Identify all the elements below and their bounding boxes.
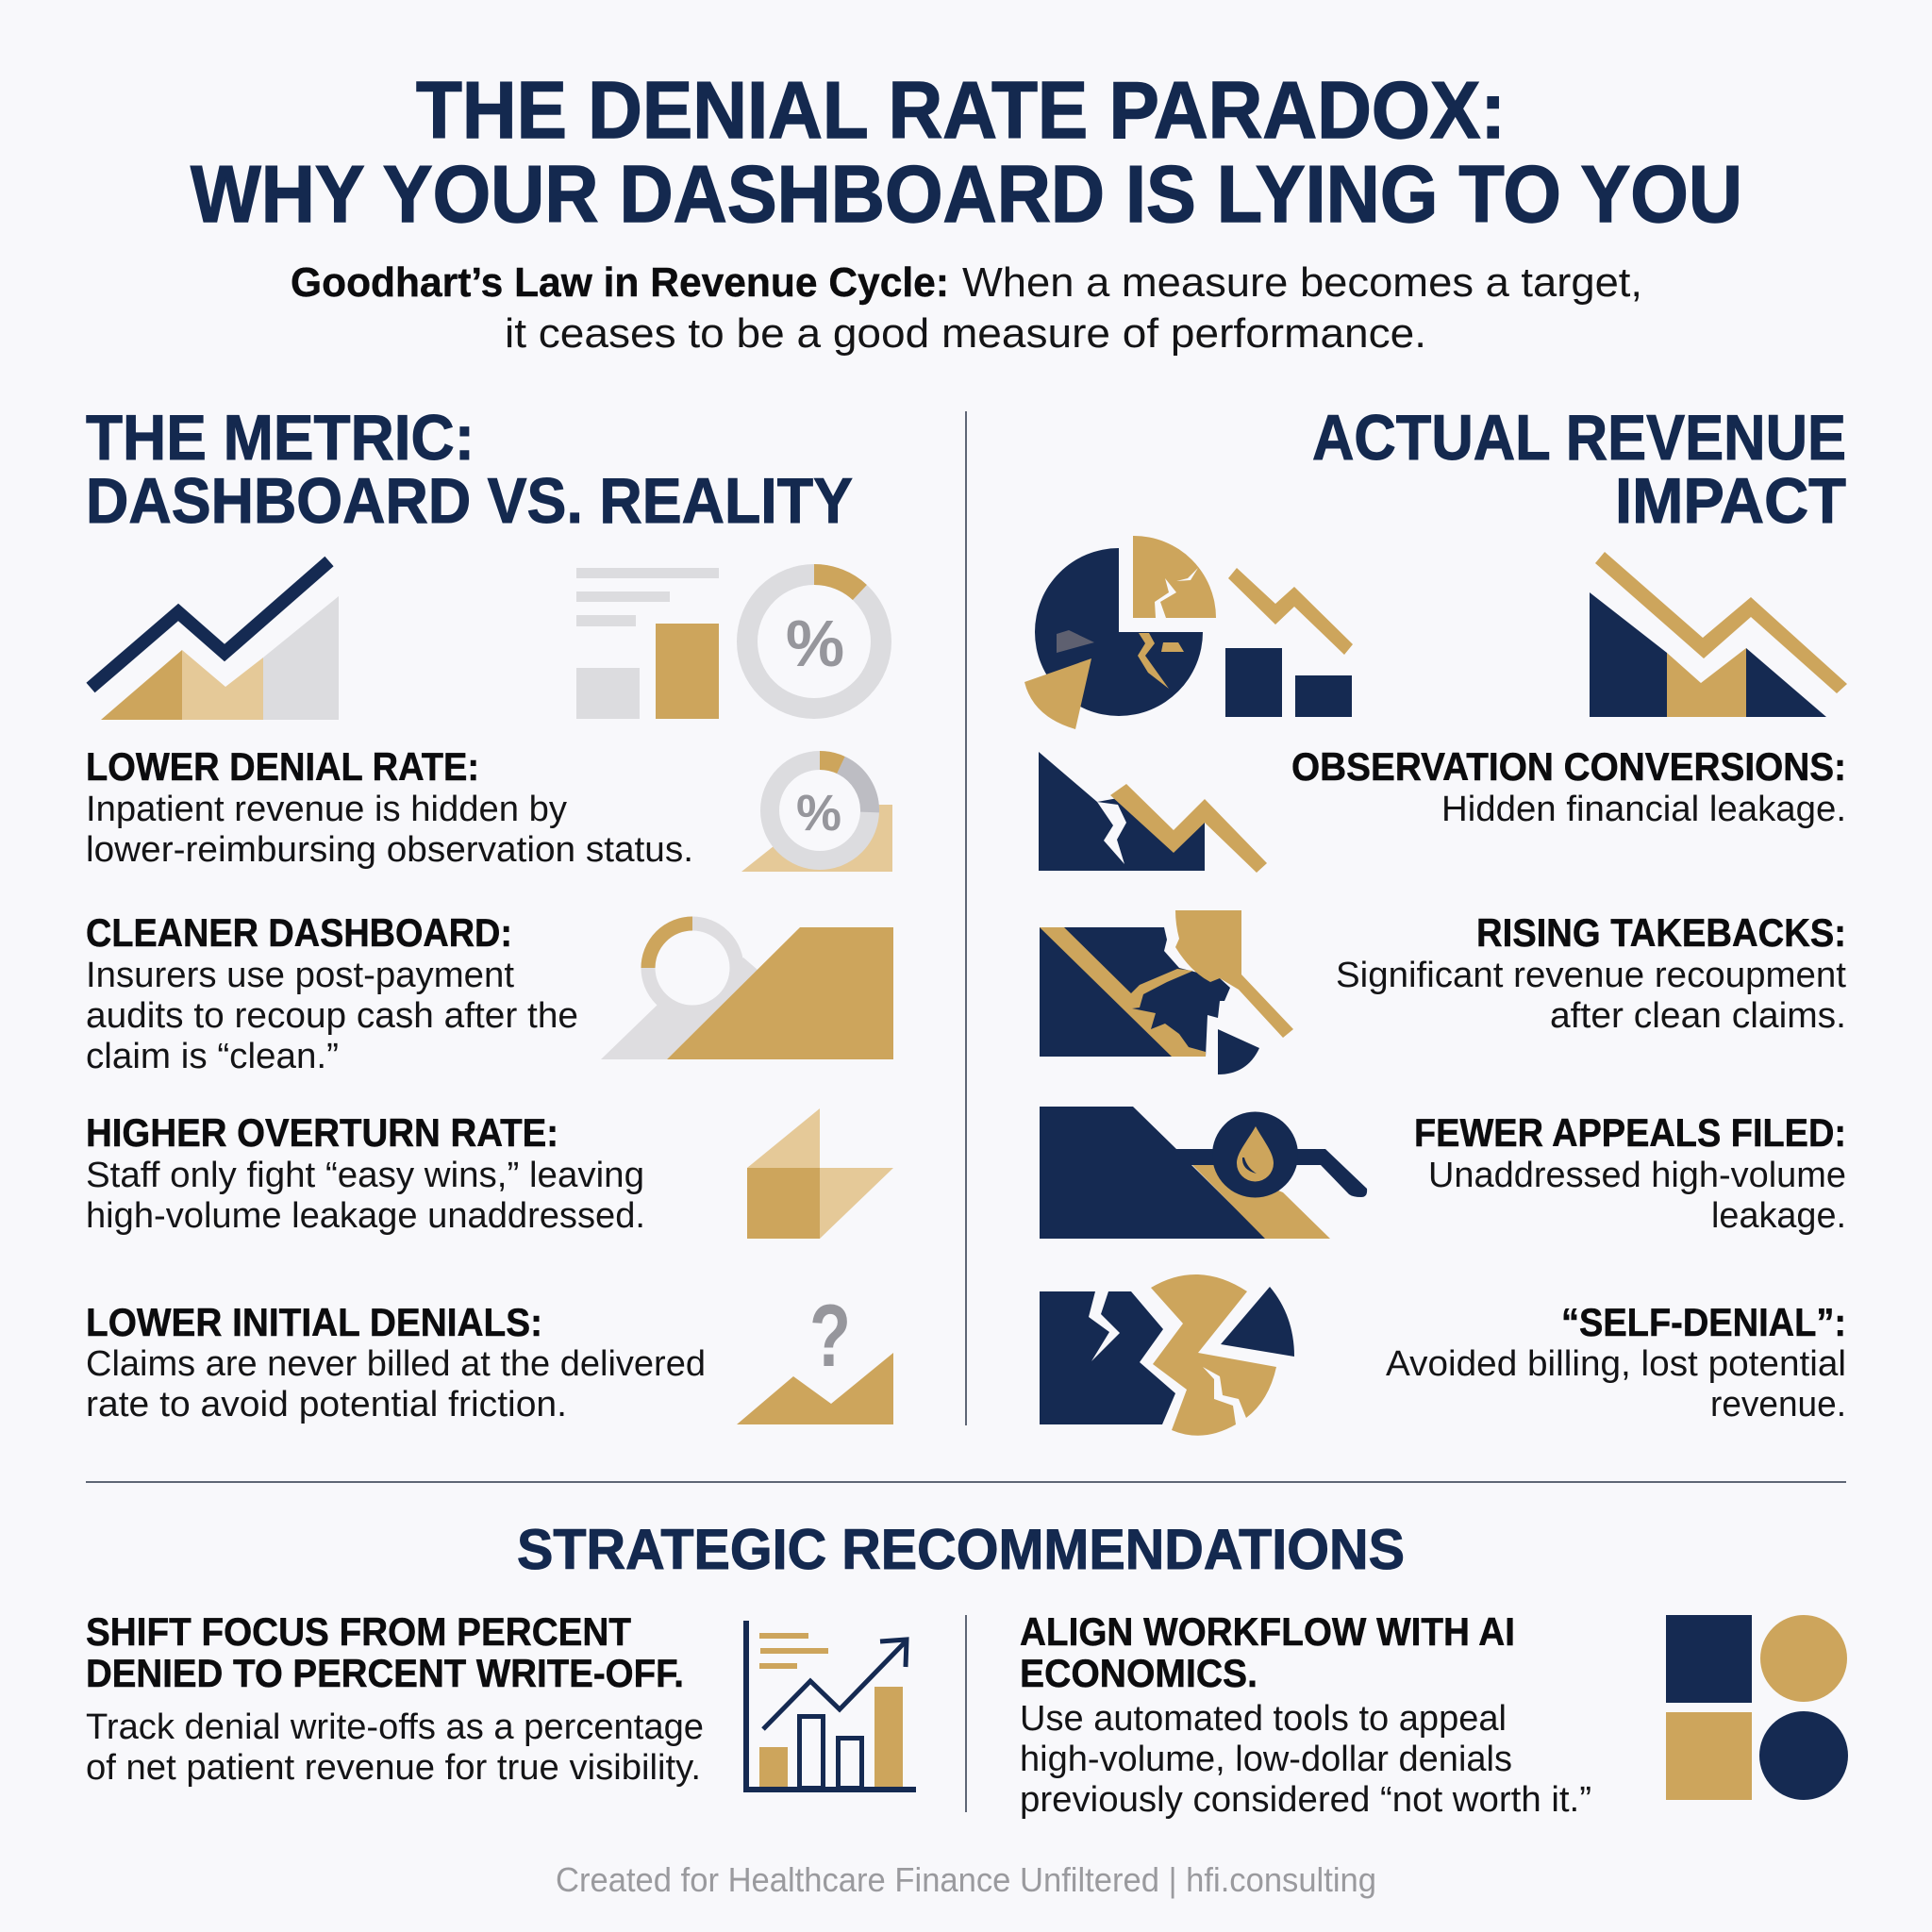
heading: actual revenue impact: IMPACT bbox=[1615, 465, 1846, 537]
body: higher overturn rate: Staff only fight “easy wins,” leaving bbox=[86, 1156, 644, 1195]
heading: the metric: THE METRIC: bbox=[86, 402, 475, 474]
body: self-denial: revenue. bbox=[1710, 1385, 1846, 1424]
icon: rising line chart bbox=[91, 561, 339, 720]
heading: actual revenue impact: ACTUAL REVENUE bbox=[1312, 402, 1846, 474]
body: lower initial denials: Claims are never billed at the delivered bbox=[86, 1344, 706, 1384]
body: align workflow: Use automated tools to appeal bbox=[1020, 1699, 1507, 1739]
heading: align workflow bbox=[1020, 1609, 1515, 1695]
icon: folded gold shape bbox=[747, 1108, 893, 1239]
icon: squares and circles bbox=[1666, 1615, 1848, 1800]
heading: fewer appeals filed: FEWER APPEALS FILED: bbox=[1414, 1110, 1846, 1155]
body: align workflow bbox=[1020, 1699, 1591, 1820]
heading: shift focus: DENIED TO PERCENT WRITE-OFF. bbox=[86, 1651, 684, 1695]
heading: higher overturn rate: HIGHER OVERTURN RATE: bbox=[86, 1110, 558, 1155]
body: fewer appeals filed: Unaddressed high-volume bbox=[1428, 1156, 1846, 1195]
panel: lower initial denials bbox=[86, 1286, 893, 1424]
icon: cracked falling chart bbox=[1039, 752, 1267, 873]
body: higher overturn rate bbox=[86, 1156, 645, 1236]
body: higher overturn rate: high-volume leakage unaddressed. bbox=[86, 1196, 645, 1236]
icon: dashboard bars bbox=[576, 568, 719, 719]
body: self-denial: Avoided billing, lost potential bbox=[1386, 1344, 1846, 1384]
heading: lower denial rate: LOWER DENIAL RATE: bbox=[86, 744, 479, 789]
panel: shift focus recommendation bbox=[86, 1609, 916, 1790]
icon: small percent donut: % bbox=[796, 785, 841, 841]
icon: shattered chart and pie bbox=[1040, 1274, 1294, 1436]
icon: question mark over chart bbox=[737, 1286, 893, 1424]
title bbox=[191, 66, 1742, 240]
icon: fractured takeback chart bbox=[1040, 910, 1293, 1074]
panel: fewer appeals filed bbox=[1040, 1107, 1846, 1239]
title: THE DENIAL RATE PARADOX: bbox=[416, 66, 1506, 156]
panel: rising takebacks bbox=[1040, 910, 1846, 1074]
heading: strategic recommendations: STRATEGIC RECOMMENDATIONS bbox=[517, 1518, 1405, 1581]
subtitle: Goodhart's Law: Goodhart’s Law in Revenue Cycle: bbox=[291, 259, 949, 306]
body: lower denial rate bbox=[86, 790, 693, 870]
body: rising takebacks: after clean claims. bbox=[1550, 996, 1846, 1036]
body: cleaner dashboard: claim is “clean.” bbox=[86, 1037, 339, 1076]
body: rising takebacks: Significant revenue recoupment bbox=[1336, 956, 1846, 995]
body: shift focus bbox=[86, 1707, 704, 1788]
heading: align workflow: ALIGN WORKFLOW WITH AI bbox=[1020, 1609, 1515, 1654]
body: lower denial rate: Inpatient revenue is hidden by bbox=[86, 790, 567, 829]
heading: observation conversions: OBSERVATION CONVERSIONS: bbox=[1291, 744, 1846, 789]
heading: lower initial denials: LOWER INITIAL DENIALS: bbox=[86, 1300, 542, 1344]
body: align workflow: previously considered “not worth it.” bbox=[1020, 1780, 1591, 1820]
footer credit: Created for Healthcare Finance Unfiltered | hfi.consulting bbox=[556, 1860, 1376, 1899]
panel: self-denial bbox=[1040, 1274, 1846, 1436]
body: observation conversions: Hidden financial leakage. bbox=[1441, 790, 1846, 829]
icon: bar chart with rising arrow bbox=[746, 1621, 916, 1790]
subtitle: Goodhart's Law bbox=[291, 259, 1642, 357]
icon: percent donut bbox=[747, 575, 881, 708]
icon: magnifier and ramp bbox=[601, 924, 893, 1059]
heading: self-denial: “SELF-DENIAL”: bbox=[1561, 1300, 1846, 1344]
body: rising takebacks bbox=[1336, 956, 1846, 1036]
heading: align workflow: ECONOMICS. bbox=[1020, 1651, 1257, 1695]
panel: lower denial rate bbox=[86, 744, 892, 872]
subtitle: Goodhart's Law: it ceases to be a good measure of performance. bbox=[505, 310, 1426, 357]
icon: question mark over chart: ? bbox=[809, 1286, 851, 1385]
title: WHY YOUR DASHBOARD IS LYING TO YOU bbox=[191, 150, 1742, 240]
heading: the metric bbox=[86, 402, 853, 537]
icon: percent donut: % bbox=[786, 607, 844, 680]
heading: rising takebacks: RISING TAKEBACKS: bbox=[1476, 910, 1846, 955]
body: lower initial denials: rate to avoid potential friction. bbox=[86, 1385, 567, 1424]
subtitle: Goodhart's Law: When a measure becomes a target, bbox=[962, 259, 1642, 306]
panel: cleaner dashboard bbox=[86, 910, 893, 1076]
body: cleaner dashboard: Insurers use post-payment bbox=[86, 956, 514, 995]
heading: shift focus: SHIFT FOCUS FROM PERCENT bbox=[86, 1609, 631, 1654]
body: fewer appeals filed: leakage. bbox=[1711, 1196, 1846, 1236]
icon: falling zigzag with bars bbox=[1225, 568, 1353, 717]
icon: falling area chart bbox=[1590, 552, 1847, 717]
body: self-denial bbox=[1386, 1344, 1846, 1424]
body: align workflow: high-volume, low-dollar denials bbox=[1020, 1740, 1512, 1779]
body: lower initial denials bbox=[86, 1344, 706, 1424]
heading: actual revenue impact bbox=[1312, 402, 1846, 537]
panel: higher overturn rate bbox=[86, 1108, 893, 1239]
body: fewer appeals filed bbox=[1428, 1156, 1846, 1236]
heading: cleaner dashboard: CLEANER DASHBOARD: bbox=[86, 910, 512, 955]
heading: shift focus bbox=[86, 1609, 684, 1695]
heading: the metric: DASHBOARD VS. REALITY bbox=[86, 465, 853, 537]
panel: align workflow recommendation bbox=[1020, 1609, 1848, 1820]
icon: broken pie chart bbox=[1024, 536, 1216, 729]
body: lower denial rate: lower-reimbursing observation status. bbox=[86, 830, 693, 870]
icon: leaking pipe bbox=[1040, 1107, 1367, 1239]
body: shift focus: of net patient revenue for true visibility. bbox=[86, 1748, 701, 1788]
panel: observation conversions bbox=[1039, 744, 1846, 873]
body: cleaner dashboard: audits to recoup cash after the bbox=[86, 996, 578, 1036]
body: cleaner dashboard bbox=[86, 956, 578, 1076]
icon: small percent donut bbox=[741, 760, 892, 872]
body: shift focus: Track denial write-offs as a percentage bbox=[86, 1707, 704, 1747]
